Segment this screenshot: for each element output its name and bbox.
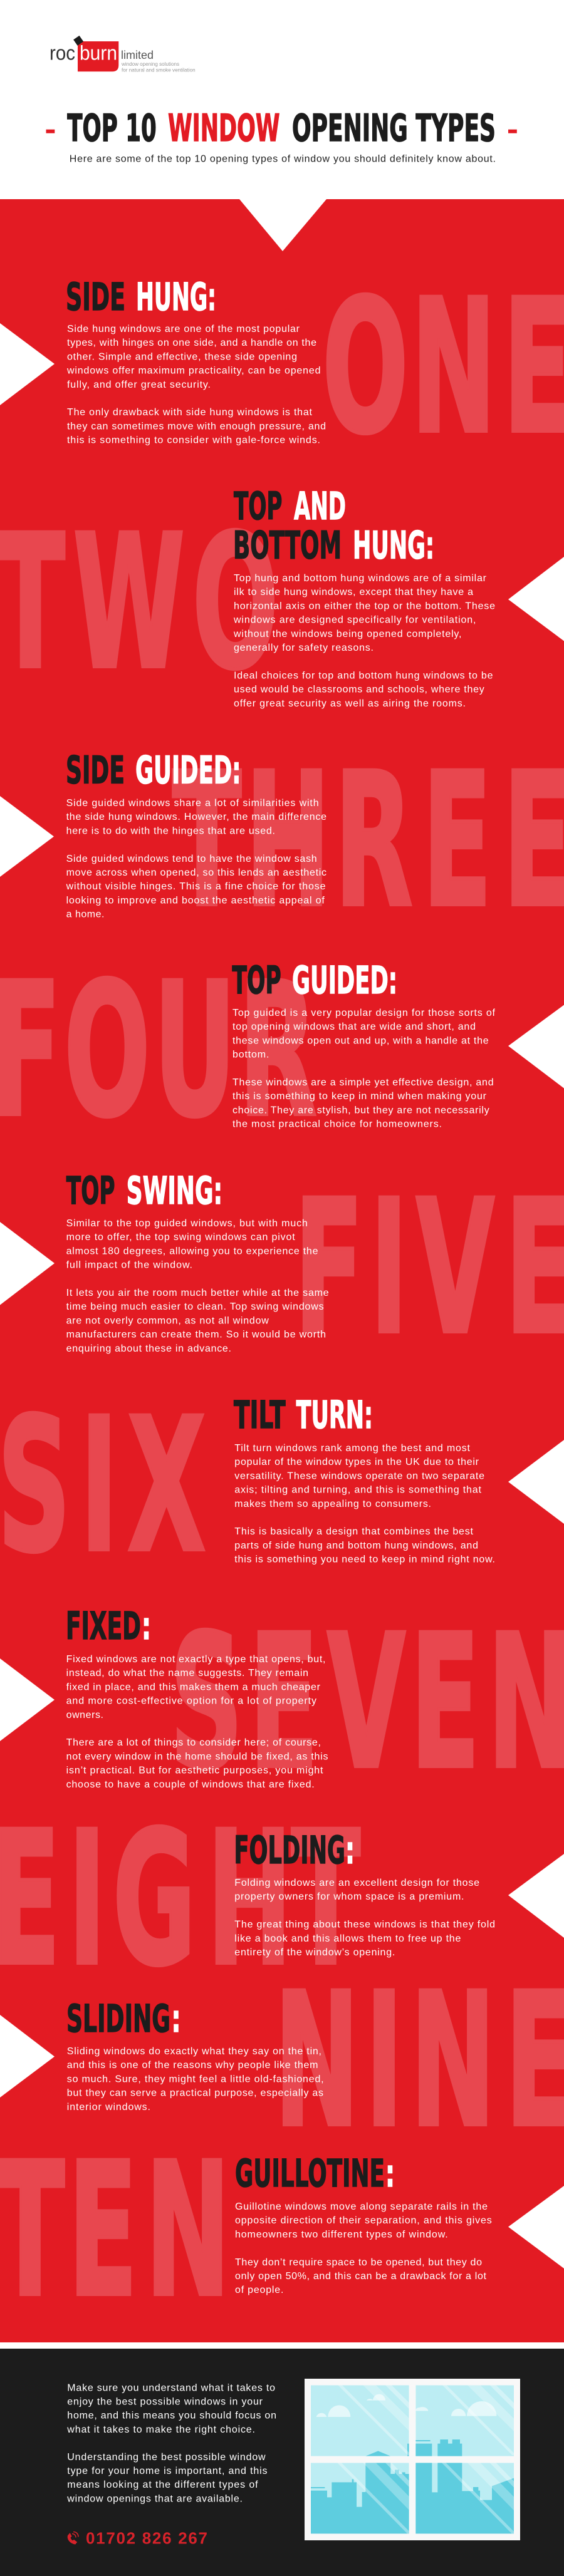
arrow: side guided <box>0 796 54 877</box>
text: side guided: looking to improve and boost the aesthetic appeal of <box>66 895 325 906</box>
icon: phone <box>68 2532 78 2544</box>
text: top swing <box>66 1218 329 1354</box>
text: side hung: The only drawback with side hung windows is that <box>67 407 313 418</box>
pane: top left <box>311 2385 412 2456</box>
text: top guided: top opening windows that are wide and short, and <box>232 1022 476 1032</box>
arrow: side hung <box>0 323 55 405</box>
title <box>46 106 517 150</box>
text: side guided: here is to do with the hinges that are used. <box>66 825 275 836</box>
text: top swing: time being much easier to clean. Top swing windows <box>66 1301 324 1312</box>
text: guillotine: Guillotine windows move along separate rails in the <box>235 2201 488 2212</box>
text: top guided: These windows are a simple yet effective design, and <box>232 1077 494 1088</box>
text: top swing: full impact of the window. <box>66 1260 192 1271</box>
section: top and bottom hung <box>233 484 564 709</box>
text: sliding <box>67 2046 324 2113</box>
text: sliding: but they can serve a practical purpose, especially as <box>67 2088 323 2099</box>
pane: bottom right <box>415 2463 514 2534</box>
text: top swing: manufacturers can create them. So it would be worth <box>66 1330 326 1340</box>
footer text: window openings that are available. <box>66 2493 243 2504</box>
text: side guided: the side hung windows. However, the main difference <box>66 812 326 822</box>
window frame <box>305 2379 520 2540</box>
text: top swing: It lets you air the room much better while at the same <box>66 1288 329 1298</box>
title: TOP 10 <box>67 106 157 150</box>
text: sliding: and this is one of the reasons why people like them <box>67 2060 318 2071</box>
section: folding <box>234 1828 564 1958</box>
heading: fixed: : <box>142 1604 151 1648</box>
text: guillotine: opposite direction of their separation, and this gives <box>235 2215 492 2226</box>
footer text <box>66 2382 276 2504</box>
text: guillotine: of people. <box>235 2285 283 2295</box>
heading: top and bottom hung: AND <box>294 484 346 529</box>
text: side hung: windows offer maximum practicality, can be opened <box>66 366 321 376</box>
text: top swing: Similar to the top guided windows, but with much <box>66 1218 308 1229</box>
heading: guillotine: GUILLOTINE <box>235 2151 385 2196</box>
text: fixed: Fixed windows are not exactly a type that opens, but, <box>66 1654 325 1665</box>
heading: side guided: GUIDED: <box>135 748 241 792</box>
section: tilt turn <box>234 1393 564 1565</box>
heading: side guided: SIDE <box>66 748 125 792</box>
text: top guided: choice. They are stylish, but they are not necessarily <box>232 1105 489 1115</box>
text: side hung: this is something to consider with gale-force winds. <box>67 435 320 446</box>
section: side guided <box>0 748 326 920</box>
text: side guided: a home. <box>66 909 104 920</box>
heading: sliding: : <box>172 1997 180 2041</box>
text: side guided: move across when opened, so this lends an aesthetic <box>66 867 326 878</box>
heading: side hung <box>66 275 216 319</box>
text: folding: entirety of the window’s opening. <box>234 1947 395 1958</box>
arrow: top guided <box>508 1005 564 1089</box>
footer text: means looking at the different types of <box>67 2480 258 2490</box>
big number: THREE: THREE <box>172 733 564 948</box>
text: tilt turn: versatility. These windows operate on two separate <box>234 1471 484 1481</box>
text: side hung: types, with hinges on one side, and a handle on the <box>67 338 316 348</box>
heading: top swing <box>66 1169 222 1213</box>
text: tilt turn: Tilt turn windows rank among the best and most <box>234 1443 471 1454</box>
heading: top swing: SWING: <box>127 1169 222 1213</box>
text: side hung: they can sometimes move with enough pressure, and <box>67 421 326 432</box>
phone number: 01702 826 267 <box>86 2529 207 2548</box>
text: top and bottom hung: ilk to side hung windows, except that they have a <box>234 587 473 597</box>
text: tilt turn: popular of the window types in the UK due to their <box>234 1457 479 1467</box>
text: sliding: interior windows. <box>67 2102 150 2113</box>
section: fixed <box>0 1604 328 1790</box>
heading: sliding <box>66 1997 180 2041</box>
arrow: top notch <box>239 199 326 251</box>
heading: fixed <box>66 1604 151 1648</box>
text: fixed: and more cost-effective option for a lot of property <box>66 1696 316 1707</box>
arrow: top swing <box>0 1222 55 1305</box>
text: side hung: other. Simple and effective, these side opening <box>67 351 297 362</box>
text: top swing: are not overly common, as not all window <box>66 1315 269 1326</box>
text: side guided <box>66 798 326 920</box>
text: top swing: more to offer, the top swing windows can pivot <box>66 1232 295 1243</box>
footer text: enjoy the best possible windows in your <box>67 2397 263 2408</box>
heading: top guided: TOP <box>232 958 281 1003</box>
heading: tilt turn <box>234 1393 373 1437</box>
text: top and bottom hung: generally for safety reasons. <box>234 643 373 653</box>
text: side hung <box>66 324 326 446</box>
text: top swing: almost 180 degrees, allowing you to experience the <box>66 1246 318 1256</box>
footer text: Make sure you understand what it takes to <box>67 2382 275 2394</box>
text: sliding: Sliding windows do exactly what they say on the tin, <box>67 2046 321 2057</box>
title: WINDOW <box>168 106 280 150</box>
text: top and bottom hung: horizontal axis on either the top or the bottom. These <box>234 601 495 611</box>
big number: FOUR: FOUR <box>0 943 317 1157</box>
heading: side hung: HUNG: <box>136 275 216 319</box>
big number: TEN: TEN <box>0 2123 230 2337</box>
footer text: home, and this means you should focus on <box>67 2411 276 2421</box>
section: guillotine <box>235 2151 564 2295</box>
heading: side guided <box>66 748 241 792</box>
logo: rocburn limited <box>50 36 196 73</box>
big number: SIX: SIX <box>0 1379 206 1593</box>
arrow: guillotine <box>508 2186 564 2268</box>
heading: top and bottom hung: HUNG: <box>353 524 434 567</box>
text: tilt turn <box>234 1443 495 1565</box>
arrow: top and bottom hung <box>508 557 564 641</box>
text: top and bottom hung: without the windows being opened completely, <box>233 629 461 639</box>
footer text: what it takes to make the right choice. <box>66 2424 255 2435</box>
text: tilt turn: This is basically a design that combines the best <box>234 1526 474 1537</box>
text: tilt turn: this is something you need to keep in mind right now. <box>234 1554 495 1565</box>
heading: tilt turn: TILT <box>234 1393 286 1437</box>
heading: top and bottom hung <box>233 484 434 567</box>
text: fixed: not every window in the home should be fixed, as this <box>66 1751 328 1762</box>
text: sliding: so much. Sure, they might feel a little old-fashioned, <box>67 2074 324 2084</box>
illustration: window with city view <box>305 2379 520 2543</box>
text: fixed: choose to have a couple of windows that are fixed. <box>66 1779 315 1790</box>
heading: top swing: TOP <box>66 1169 115 1213</box>
text: top guided: the most practical choice for homeowners. <box>232 1119 442 1130</box>
text: tilt turn: parts of side hung and bottom hung windows, and <box>234 1540 478 1551</box>
text: fixed: There are a lot of things to consider here; of course, <box>66 1737 321 1748</box>
text: fixed: owners. <box>66 1710 103 1720</box>
heading: top and bottom hung: BOTTOM <box>233 524 342 567</box>
arrow: fixed <box>0 1658 55 1741</box>
text: top guided: these windows open out and up, with a handle at the <box>232 1035 489 1046</box>
text: top swing: enquiring about these in advance. <box>66 1343 231 1354</box>
heading: guillotine: : <box>385 2151 395 2196</box>
text: side guided: without visible hinges. This is a fine choice for those <box>66 881 326 892</box>
text: top and bottom hung: used would be classrooms and schools, where they <box>234 685 484 695</box>
big number: EIGHT: EIGHT <box>0 1792 360 2006</box>
heading: sliding: SLIDING <box>66 1997 170 2041</box>
text: folding: Folding windows are an excellent design for those <box>234 1878 479 1888</box>
heading: guillotine <box>235 2151 395 2196</box>
footer text: Understanding the best possible window <box>67 2452 266 2463</box>
heading: top guided <box>232 958 397 1003</box>
text: guillotine: homeowners two different types of window. <box>235 2229 448 2240</box>
text: top guided: bottom. <box>232 1050 269 1060</box>
section: top swing <box>0 1169 329 1354</box>
text: top and bottom hung: Top hung and bottom hung windows are of a similar <box>234 573 487 584</box>
text: guillotine: They don’t require space to be opened, but they do <box>235 2257 482 2268</box>
text: folding <box>234 1878 495 1958</box>
text: top and bottom hung: Ideal choices for top and bottom hung windows to be <box>234 670 493 681</box>
heading: tilt turn: TURN: <box>296 1393 373 1437</box>
heading: top guided: GUIDED: <box>292 958 397 1003</box>
logo: rocburn limited: burn <box>80 42 117 65</box>
pane: bottom left <box>311 2463 409 2534</box>
logo: rocburn limited: window opening solutions <box>121 61 179 67</box>
text: side guided: Side guided windows share a lot of similarities with <box>66 798 319 809</box>
text: fixed: instead, do what the name suggests. They remain <box>66 1668 308 1679</box>
section: sliding <box>0 1997 324 2113</box>
header panel <box>0 0 564 199</box>
text: fixed <box>66 1654 328 1790</box>
arrow: folding <box>508 1854 564 1938</box>
text: folding: The great thing about these windows is that they fold <box>234 1920 495 1930</box>
heading: folding: FOLDING <box>234 1828 345 1873</box>
text: guillotine <box>235 2201 492 2295</box>
text: fixed: isn’t practical. But for aesthetic purposes, you might <box>66 1766 323 1776</box>
text: top guided: Top guided is a very popular design for those sorts of <box>232 1008 496 1018</box>
big number: TWO: TWO <box>0 495 278 710</box>
text: tilt turn: makes them so appealing to consumers. <box>234 1499 431 1509</box>
text: top and bottom hung: windows are designed specifically for ventilation, <box>233 615 476 626</box>
text: top guided: this is something to keep in mind when making your <box>232 1091 487 1102</box>
text: tilt turn: axis; tilting and turning, and this is something that <box>234 1485 482 1496</box>
big number: SEVEN: SEVEN <box>170 1595 564 1809</box>
text: fixed: fixed in place, and this makes them a much cheaper <box>66 1682 321 1692</box>
text: guillotine: only open 50%, and this can be a drawback for a lot <box>235 2271 487 2282</box>
subtitle: Here are some of the top 10 opening types of window you should definitely know about. <box>70 153 496 164</box>
footer text: type for your home is important, and this <box>67 2466 268 2476</box>
section: top guided <box>232 958 564 1130</box>
text: side hung: fully, and offer great security. <box>67 380 211 390</box>
logo: rocburn limited: roc <box>50 42 75 65</box>
pane: top right <box>414 2385 516 2458</box>
arrow: tilt turn <box>508 1440 564 1524</box>
heading: top and bottom hung: TOP <box>234 484 282 529</box>
logo: rocburn limited: for natural and smoke ventilation <box>122 67 196 73</box>
heading: folding: : <box>345 1828 355 1873</box>
footer panel <box>0 2349 564 2576</box>
text: side guided: Side guided windows tend to have the window sash <box>66 854 317 864</box>
text: top guided <box>232 1008 496 1130</box>
text: top and bottom hung <box>233 573 495 709</box>
text: folding: like a book and this allows them to free up the <box>234 1933 461 1944</box>
heading: side hung: SIDE <box>66 275 125 319</box>
logo: rocburn limited: limited <box>121 49 154 61</box>
text: top and bottom hung: offer great security as well as airing the rooms. <box>234 698 466 709</box>
section: side hung <box>0 275 326 446</box>
text: folding: property owners for whom space is a premium. <box>234 1891 464 1902</box>
arrow: sliding <box>0 2015 55 2098</box>
text: side hung: Side hung windows are one of the most popular <box>67 324 300 334</box>
heading: fixed: FIXED <box>66 1604 141 1648</box>
heading: folding <box>234 1828 355 1873</box>
